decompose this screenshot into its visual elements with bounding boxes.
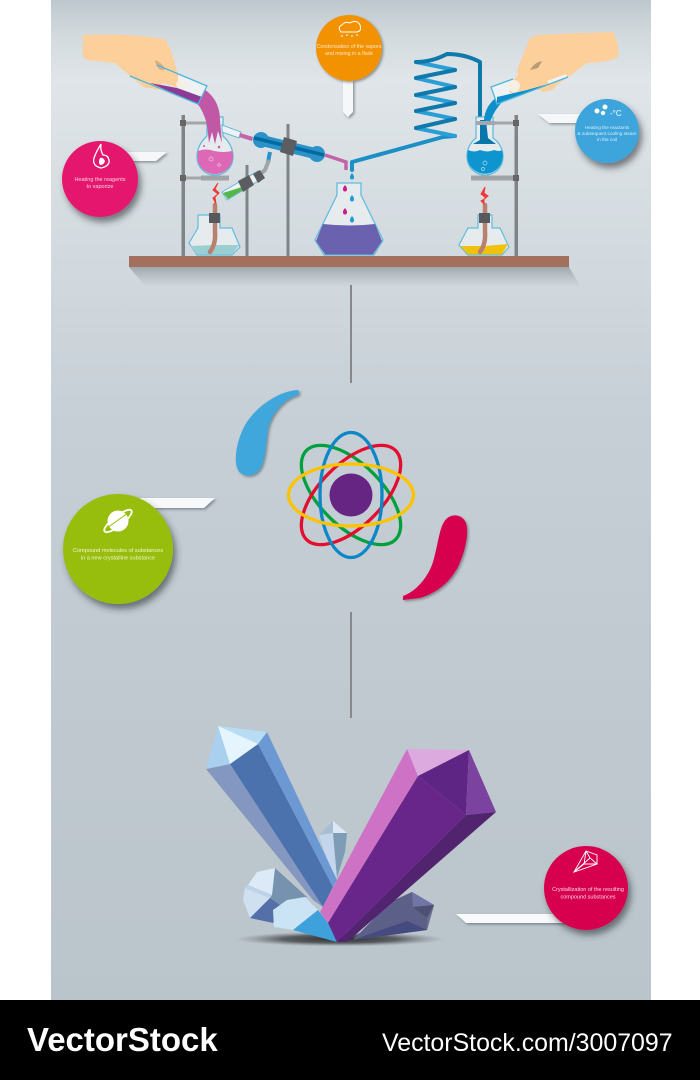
blue coil — [352, 54, 480, 170]
callout text: & subsequent cooling steam — [578, 131, 637, 136]
callout circle — [62, 141, 138, 217]
callout text: and mixing in a flask — [325, 51, 373, 57]
shelf shadow — [129, 267, 581, 287]
footer brand: VectorStock — [27, 1021, 218, 1058]
left test tube and hand — [83, 34, 222, 144]
callout text: Crystallization of the resulting — [552, 887, 624, 893]
callout text: Heating the reagents — [74, 177, 126, 183]
tall blue crystal — [206, 726, 337, 907]
right round flask — [467, 117, 503, 175]
callout banner — [135, 498, 215, 508]
callout circle — [575, 99, 639, 163]
callout text: Heating the reactants — [585, 125, 630, 130]
left round flask — [197, 117, 233, 175]
callout: heating reactants — [538, 99, 639, 163]
blue teardrop — [236, 390, 299, 475]
right burner — [459, 187, 509, 255]
background panel — [51, 0, 651, 1000]
callout: compound molecules — [63, 494, 215, 604]
callout banner — [456, 914, 565, 923]
falling drops — [343, 173, 354, 222]
nucleus — [330, 474, 372, 516]
callout circle — [63, 494, 173, 604]
connector line bottom — [350, 612, 352, 718]
callout: crystallization — [456, 846, 628, 930]
footer bar — [0, 1000, 700, 1080]
condenser — [253, 132, 325, 162]
callout banner — [127, 152, 167, 161]
callout text: in a new crystalline substance — [81, 556, 155, 562]
left burner — [189, 183, 240, 255]
middle stands — [246, 124, 290, 256]
front boulder — [273, 897, 337, 942]
left stand — [180, 115, 229, 256]
left side arm — [222, 125, 253, 141]
callout circle — [544, 846, 628, 930]
left boulder — [243, 868, 307, 923]
icon: rain cloud — [339, 21, 361, 37]
icon: flame drop — [94, 144, 109, 168]
footer image id: VectorStock.com/3007097 — [382, 1029, 673, 1057]
shelf — [129, 256, 569, 267]
callout text: Compound molecules of substances — [73, 548, 163, 554]
callout pin — [343, 80, 353, 117]
crystals — [206, 726, 496, 942]
callout: heating the reagents — [62, 141, 167, 217]
icon: planet — [102, 507, 134, 535]
right dark crystal — [353, 892, 434, 940]
icon: diamond — [574, 851, 597, 872]
callout text: compound substances — [560, 894, 616, 900]
right test tube and hand — [476, 32, 618, 125]
crystal ground shadow — [235, 932, 445, 946]
callout text: in the coil — [597, 137, 617, 142]
callout banner — [538, 114, 580, 123]
callout: condensation — [316, 15, 382, 117]
small grey-blue crystal — [319, 821, 347, 878]
green tube — [222, 160, 269, 200]
center flask — [315, 173, 383, 255]
connector line top — [350, 285, 352, 383]
callout text: Condensation of the vapors — [317, 44, 382, 50]
red teardrop — [403, 515, 467, 600]
icon: snowflakes and temperature: -°C — [610, 109, 622, 118]
pink outlet tube — [325, 155, 346, 170]
right stand — [471, 115, 519, 256]
atom — [285, 429, 417, 561]
callout text: to vaporize — [87, 184, 113, 190]
large purple crystal — [320, 749, 496, 942]
callout circle — [316, 15, 382, 81]
